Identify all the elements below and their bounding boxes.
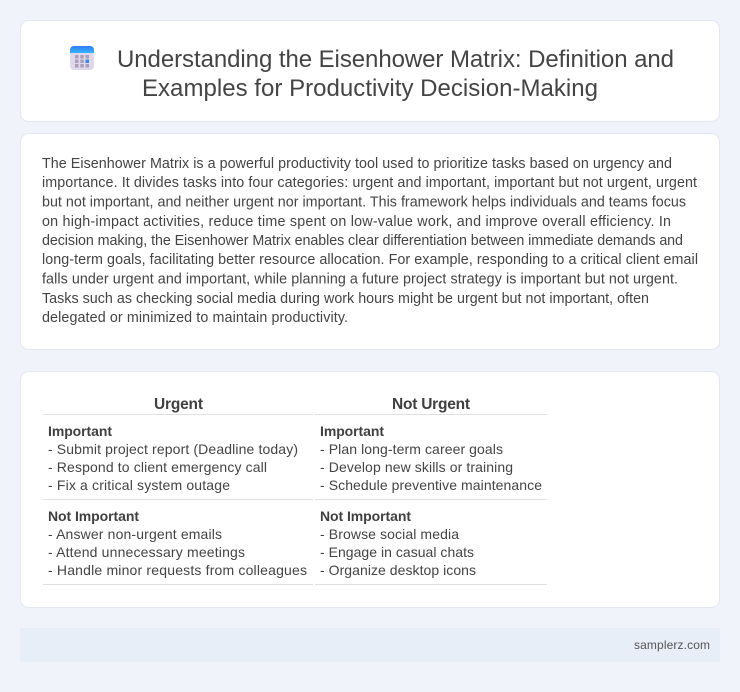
text block: description paragraph: on high-impact activities, reduce time spent on low-value work, and improve overall efficiency. In [42, 214, 671, 230]
cell: urgent and not important: - Answer non-urgent emails [48, 526, 222, 542]
cell: urgent and important [48, 423, 298, 493]
cell: urgent and not important: - Attend unnecessary meetings [48, 544, 245, 560]
text block: description paragraph [42, 156, 698, 326]
cell: urgent and not important: - Handle minor requests from colleagues [48, 562, 307, 578]
cell: not urgent and not important [320, 508, 476, 578]
title: Understanding the Eisenhower Matrix: Definition and [117, 46, 674, 73]
icon: calendar [70, 46, 94, 70]
text block: description paragraph: importance. It divides tasks into four categories: urgent and important, important but not urgent, urgent [42, 175, 697, 191]
cell: not urgent and important: - Schedule preventive maintenance [320, 477, 542, 493]
title [117, 46, 674, 102]
text block: description paragraph: but not important, and neither urgent nor important. This framework helps individuals and teams focus [42, 194, 686, 210]
panel: description [20, 134, 720, 350]
text block: description paragraph: long-term goals, facilitating better resource allocation. For example, responding to a critical client email [42, 252, 698, 268]
cell: urgent and important: Important [48, 423, 112, 439]
footer: samplerz.com [634, 638, 710, 652]
panel: matrix table [20, 372, 720, 608]
cell: not urgent and not important: - Browse social media [320, 526, 459, 542]
cell: not urgent and important [320, 423, 542, 493]
cell: not urgent and important: - Plan long-term career goals [320, 441, 503, 457]
cell: urgent and not important [48, 508, 307, 578]
text block: description paragraph: decision making, the Eisenhower Matrix enables clear differentiation between immediate demands and [42, 233, 683, 249]
cell: not urgent and not important: - Organize desktop icons [320, 562, 476, 578]
cell: not urgent and not important: - Engage in casual chats [320, 544, 474, 560]
cell: not urgent and important: - Develop new skills or training [320, 459, 513, 475]
column heading: not urgent: Not Urgent [392, 396, 470, 413]
cell: urgent and important: - Fix a critical system outage [48, 477, 230, 493]
cell: not urgent and not important: Not Important [320, 508, 411, 524]
text block: description paragraph: delegated or minimized to maintain productivity. [42, 310, 348, 326]
column heading: urgent: Urgent [154, 396, 203, 413]
cell: urgent and important: - Respond to client emergency call [48, 459, 267, 475]
title: Examples for Productivity Decision-Making [142, 75, 598, 102]
cell: urgent and not important: Not Important [48, 508, 139, 524]
cell: urgent and important: - Submit project report (Deadline today) [48, 441, 298, 457]
text block: description paragraph: Tasks such as checking social media during work hours might be urgent but not important, often [42, 291, 649, 307]
text block: description paragraph: falls under urgent and important, while planning a future project strategy is important but not urgent. [42, 272, 678, 288]
panel: header [20, 20, 720, 122]
text block: description paragraph: The Eisenhower Matrix is a powerful productivity tool used to prioritize tasks based on urgency and [42, 156, 672, 172]
cell: not urgent and important: Important [320, 423, 384, 439]
footer [20, 628, 720, 662]
